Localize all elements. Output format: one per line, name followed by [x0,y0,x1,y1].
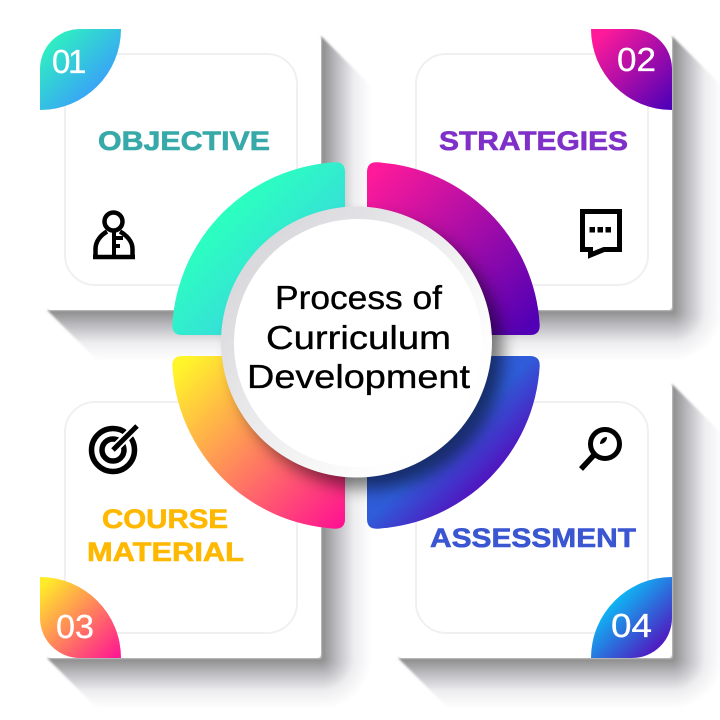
icon: target [92,426,137,472]
heading: objective: OBJECTIVE [98,126,270,156]
badge: 02 [591,29,672,110]
heading: assessment: ASSESSMENT [430,523,637,553]
title: Process of [275,279,443,316]
badge: 01 [40,29,121,110]
heading: course material [87,504,244,567]
title [247,279,470,395]
badge: 01: 01 [52,43,86,80]
badge: 03: 03 [56,608,94,645]
central circle [221,206,492,478]
ring segment: yellow [172,356,345,529]
ring segment: magenta [367,162,540,335]
badge: 04 [591,577,672,658]
ring segment: blue [367,356,540,529]
badge: 02: 02 [617,41,656,78]
title: Development [247,358,470,395]
panel: objective card [47,36,372,361]
icon: person [93,212,135,257]
panel: assessment card [398,384,720,709]
badge: 04: 04 [611,607,652,644]
ring segment: teal [172,162,345,335]
icon: speech bubble [582,212,620,255]
heading: course material: COURSE [102,504,228,534]
central circle shadow [233,219,503,489]
icon: magnifier [581,430,620,469]
heading: strategies: STRATEGIES [439,126,628,156]
heading: course material: MATERIAL [87,537,244,567]
panel: course material card [47,384,372,709]
title: Curriculum [266,319,451,356]
badge: 03 [40,577,121,658]
panel: strategies card [398,36,720,361]
